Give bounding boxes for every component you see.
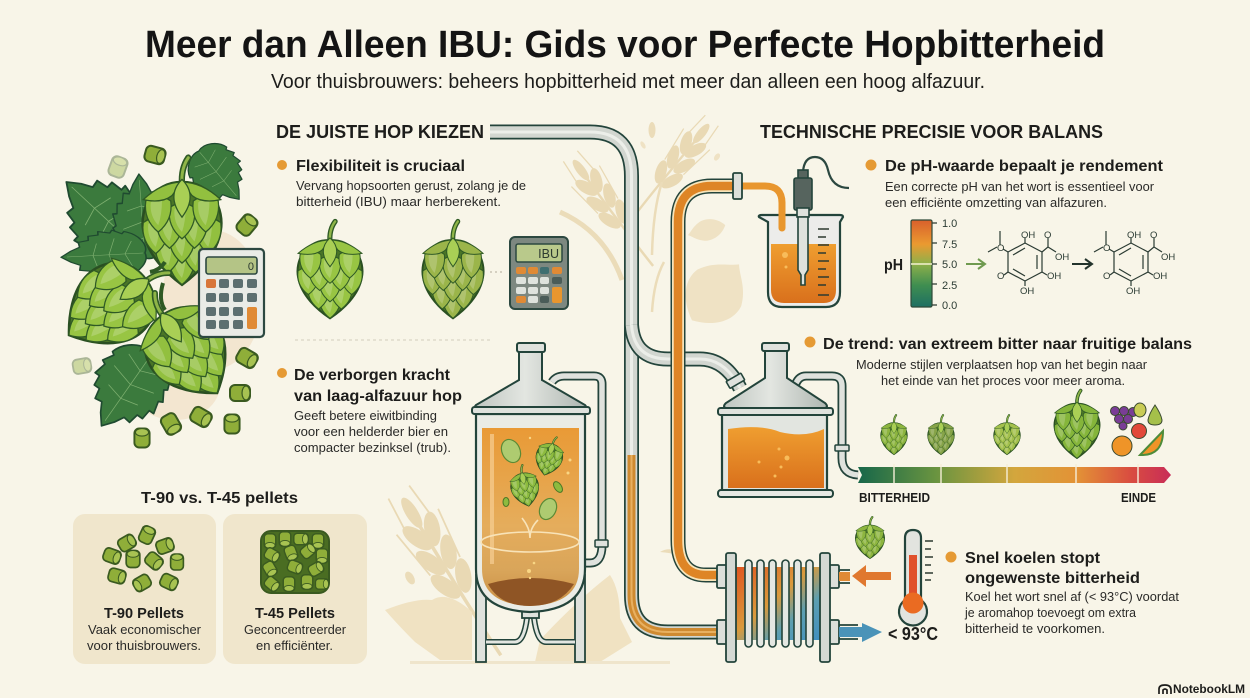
icon: dull hop (422, 221, 484, 318)
arrow: green (966, 259, 985, 269)
molecule 1: O (997, 243, 1004, 254)
liquid (728, 427, 824, 488)
arrow: dark (1072, 259, 1092, 269)
logo text: NotebookLM (1173, 684, 1245, 696)
bullet (804, 336, 816, 348)
card text: Vaak economischer (88, 623, 201, 637)
body: Geeft betere eiwitbinding (294, 409, 437, 423)
base plate (718, 490, 833, 497)
tank body (476, 414, 585, 612)
body: een efficiënte omzetting van alfazuren. (885, 196, 1107, 210)
molecule 2: OH (1127, 230, 1141, 241)
dome (724, 350, 827, 408)
pipes (490, 132, 786, 632)
neck cap (762, 343, 789, 351)
kettle tank (718, 343, 858, 497)
icon: calculator: 0 (248, 261, 254, 273)
vessel body (722, 414, 827, 491)
ticks (894, 464, 1138, 483)
body: compacter bezinksel (trub). (294, 441, 451, 455)
molecule 2 (1094, 230, 1175, 297)
lid rim (472, 407, 590, 414)
molecule 1: OH (1020, 286, 1034, 297)
molecule 1: O (997, 271, 1004, 282)
block: laag-alfazuur hop (277, 367, 462, 455)
fins (745, 560, 813, 647)
card title: T-45 Pellets (255, 605, 335, 622)
bullet (277, 160, 287, 170)
body: bitterheid te voorkomen. (965, 622, 1105, 636)
beaker with pH probe (759, 157, 849, 307)
pH scale: 1.0 (942, 218, 957, 230)
probe (794, 170, 812, 285)
molecule 2: O (1103, 243, 1110, 254)
hop cones (143, 158, 221, 285)
label: end: EINDE (1121, 491, 1156, 505)
molecule 2: OH (1153, 271, 1167, 282)
central fermenter tank (472, 343, 608, 662)
arrow: orange in (852, 565, 891, 587)
hops floating in tank (498, 433, 567, 522)
dome lid (475, 352, 586, 408)
heading: ongewenste bitterheid (965, 570, 1140, 587)
pH scale: 0.0 (942, 300, 957, 312)
pipe: orange wort line (678, 173, 786, 575)
card: T-45 (223, 514, 367, 664)
pipe: silver transfer line (490, 132, 718, 632)
card text: voor thuisbrouwers. (87, 639, 201, 653)
heading: De pH-waarde bepaalt je rendement (885, 158, 1164, 175)
card text: Geconcentreerder (244, 623, 346, 637)
decorative wheat and leaves (130, 110, 761, 668)
bubbles (527, 437, 572, 579)
block: pH (866, 158, 1175, 312)
highlight (490, 434, 494, 564)
dotted connector (490, 271, 505, 273)
icon: IBU calculator: IBU (538, 247, 559, 261)
body: je aromahop toevoegt om extra (964, 606, 1136, 620)
icon: fruit (1110, 403, 1163, 456)
pH scale: 7.5 (942, 239, 957, 251)
hop stage icons (881, 415, 907, 455)
neck cap (517, 343, 545, 352)
molecule 2: O (1103, 271, 1110, 282)
timeline arrow (858, 391, 1171, 505)
block: snel koelen (946, 550, 1180, 636)
section heading: right: TECHNISCHE PRECISIE VOOR BALANS (760, 122, 1103, 142)
body: Een correcte pH van het wort is essentieel voor (885, 180, 1154, 194)
gradient bar (858, 467, 1171, 483)
big hop illustration with calculator (40, 134, 264, 448)
logo mark (1159, 685, 1171, 694)
title: Meer dan Alleen IBU: Gids voor Perfecte Hopbitterheid (145, 24, 1105, 66)
molecule 2: OH (1126, 286, 1140, 297)
pH scale: pH (884, 257, 903, 274)
icon: calculator (199, 249, 264, 337)
icon: compressed pellets (261, 531, 329, 593)
molecule 1 (988, 230, 1069, 297)
icon: bright hop (298, 221, 362, 318)
block: flexibiliteit (277, 158, 568, 318)
body: Vervang hopsoorten gerust, zolang je de (296, 179, 526, 193)
plates (726, 553, 830, 662)
bullet (946, 552, 956, 562)
molecule 1: OH (1055, 252, 1069, 263)
molecule 1: OH (1047, 271, 1061, 282)
card text: en efficiënter. (256, 639, 333, 653)
body: bitterheid (IBU) maar herberekent. (296, 195, 501, 209)
pH scale: 5.0 (942, 259, 957, 271)
wort liquid (482, 428, 579, 606)
core (736, 567, 820, 640)
graduations (818, 229, 829, 295)
body: Koel het wort snel af (< 93°C) voordat (965, 590, 1180, 604)
molecule 2: O (1150, 230, 1157, 241)
icon: hop (856, 517, 884, 558)
pH scale: 2.5 (942, 280, 957, 292)
heading: De verborgen kracht (294, 367, 451, 384)
molecule 1: OH (1021, 230, 1035, 241)
molecule 1: O (1044, 230, 1051, 241)
lid rim (718, 408, 833, 415)
side pipe (795, 376, 858, 475)
card: T-90 (73, 514, 216, 664)
temperature label: < 93°C (888, 624, 938, 644)
pellet comparison heading: T-90 vs. T-45 pellets (141, 490, 298, 507)
pipe clamp (726, 373, 745, 388)
body: Moderne stijlen verplaatsen hop van het begin naar (856, 358, 1147, 372)
legs and drain (476, 575, 585, 662)
section heading: left: DE JUISTE HOP KIEZEN (276, 122, 484, 142)
subtitle: Voor thuisbrouwers: beheers hopbitterheid met meer dan alleen een hoog alfazuur. (271, 70, 985, 93)
icon: thermometer (899, 530, 933, 625)
body: het einde van het proces voor meer aroma. (881, 374, 1125, 388)
body: voor een helderder bier en (294, 425, 448, 439)
pH scale (884, 218, 957, 312)
beaker liquid (771, 244, 836, 303)
heat exchanger (717, 517, 938, 662)
label: start: BITTERHEID (859, 491, 930, 505)
heading: van laag-alfazuur hop (294, 388, 462, 405)
pellets scattered (72, 145, 260, 448)
bullet (866, 160, 876, 170)
NotebookLM watermark (1159, 684, 1245, 696)
beaker glass (759, 215, 843, 307)
ripple (481, 518, 579, 552)
outlet stubs (839, 570, 858, 639)
pipe: branch to kettle (632, 325, 740, 388)
heading: De trend: van extreem bitter naar fruitige balans (823, 336, 1192, 353)
molecule 2: OH (1161, 252, 1175, 263)
bullet (277, 368, 287, 378)
leaves (40, 134, 259, 447)
icon: IBU calculator (510, 237, 568, 309)
orange drip (778, 203, 786, 228)
connectors (717, 565, 839, 644)
icon: loose pellets (102, 524, 183, 593)
sediment trub (488, 578, 574, 606)
side pipe (552, 376, 608, 563)
probe cable (803, 157, 849, 188)
heading: Snel koelen stopt (965, 550, 1101, 567)
heading: Flexibiliteit is cruciaal (296, 158, 465, 175)
card title: T-90 Pellets (104, 605, 184, 622)
block: trend (804, 336, 1192, 388)
arrow: blue out (839, 623, 882, 642)
